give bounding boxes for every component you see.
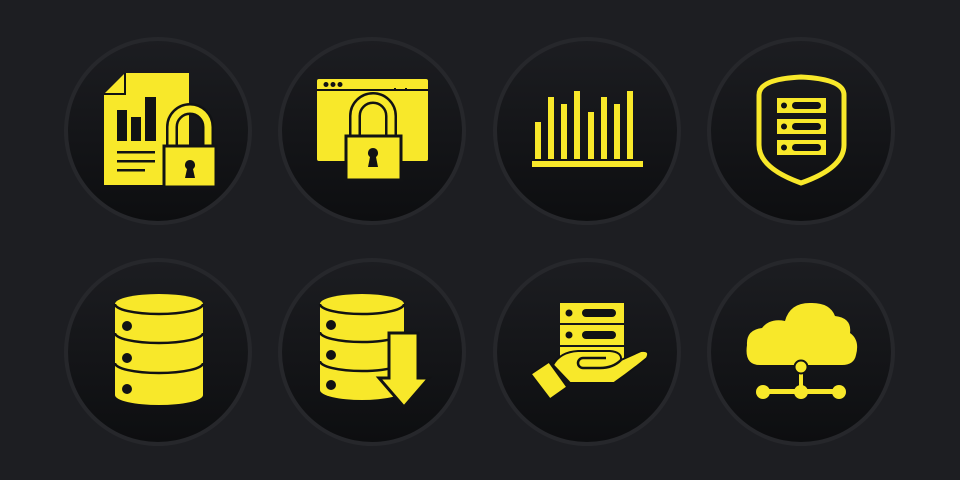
icon: document with chart and lock [104,73,216,187]
icon: shield with server [759,77,844,183]
panel: circle 7 background [493,258,681,446]
panel: circle 5 background [64,258,252,446]
icon: bar chart [532,91,643,167]
icon: cloud network [747,303,857,399]
panel: circle 1 background [64,37,252,225]
panel: circle 8 background [707,258,895,446]
panel: circle 3 background [493,37,681,225]
icon: browser window with lock [317,79,428,180]
icon: database [115,294,203,405]
panel: circle 2 background [278,37,466,225]
panel: circle 4 background [707,37,895,225]
icon: database with download arrow [320,294,429,407]
panel: circle 6 background [278,258,466,446]
icon: hand holding server [531,303,648,399]
